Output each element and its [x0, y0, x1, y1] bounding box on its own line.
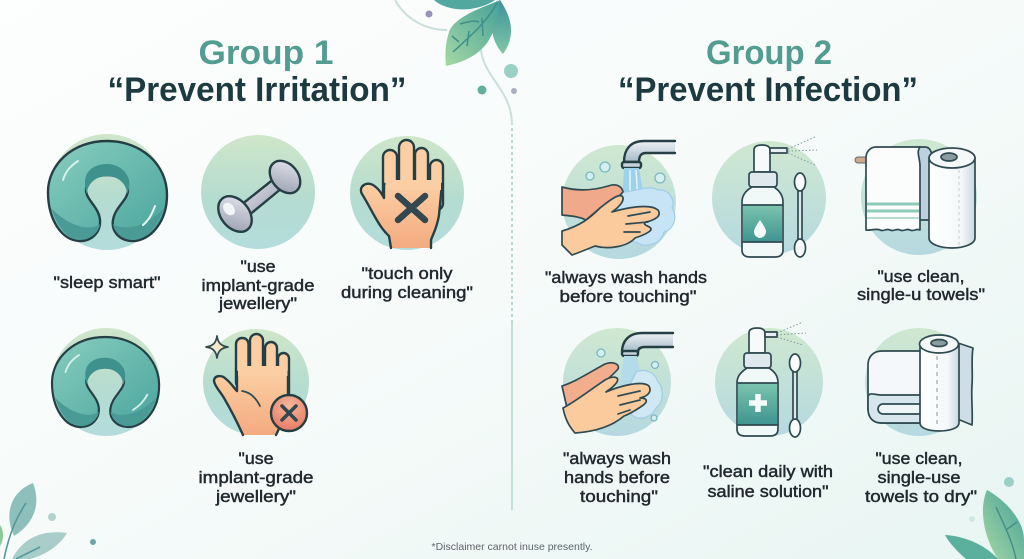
label: sleep smart: "sleep smart" [54, 273, 160, 292]
label: use clean, single-u towels: single-u towels" [857, 285, 985, 304]
label: use implant-grade jewellery (top): "use [240, 257, 276, 276]
label: clean daily with saline solution: saline solution" [708, 482, 828, 501]
icon: neck pillow 1 [48, 134, 167, 250]
icon: washing hands under tap 2 [562, 328, 673, 436]
label: use implant-grade jewellery (bottom): "use [238, 449, 274, 468]
label: clean daily with saline solution: "clean daily with [703, 462, 833, 481]
icon: neck pillow 2 [52, 328, 160, 436]
heading: group 1: “Prevent Irritation” [108, 71, 406, 109]
label: use implant-grade jewellery (top): jewellery" [218, 294, 297, 313]
centre divider [511, 128, 513, 510]
heading: group 1 [108, 34, 406, 109]
icon: towel and paper roll 1 [855, 139, 977, 255]
top botanical decoration [395, 0, 518, 125]
label: use clean, single-u towels [857, 267, 985, 304]
label: touch only during cleaning [341, 264, 473, 302]
icon: saline spray and swab 2 [715, 322, 823, 437]
heading: group 2: Group 2 [706, 34, 832, 72]
label: always wash hands before touching (top): before touching" [560, 287, 696, 306]
label: touch only during cleaning: "touch only [362, 264, 453, 283]
label: use clean, single-use towels to dry: "use clean, [876, 449, 962, 468]
label: clean daily with saline solution [703, 462, 833, 501]
label: use clean, single-u towels: "use clean, [878, 267, 964, 286]
label: use clean, single-use towels to dry [865, 449, 977, 506]
icon: washing hands under tap 1 [562, 141, 676, 259]
bottom-left botanical decoration [0, 483, 96, 559]
heading: group 2 [618, 34, 918, 109]
label: always wash hands before touching (bottom) [563, 449, 671, 506]
icon: hand with cross [350, 136, 464, 250]
label: use implant-grade jewellery (top) [202, 257, 314, 313]
label: use implant-grade jewellery (bottom) [198, 449, 314, 506]
label: use implant-grade jewellery (top): implant-grade [202, 276, 314, 295]
label: touch only during cleaning: during cleaning" [341, 283, 473, 302]
label: always wash hands before touching (bottom): "always wash [563, 449, 671, 468]
label: use clean, single-use towels to dry: towels to dry" [865, 487, 977, 506]
disclaimer: *Disclaimer carnot inuse presently. [432, 541, 592, 553]
label: always wash hands before touching (top) [545, 268, 707, 306]
bottom-right botanical decoration [945, 477, 1024, 559]
icon: raised hand with cross badge [203, 329, 309, 435]
icon: saline spray and swab 1 [712, 137, 826, 257]
label: use clean, single-use towels to dry: single-use [878, 468, 960, 487]
heading: group 1: Group 1 [198, 34, 334, 72]
label: always wash hands before touching (top): "always wash hands [545, 268, 707, 287]
label: use implant-grade jewellery (bottom): implant-grade [198, 468, 314, 487]
icon: implant-grade barbell [201, 135, 315, 249]
icon: folded towel and paper roll 2 [865, 328, 973, 436]
label: use implant-grade jewellery (bottom): jewellery" [215, 487, 296, 506]
label: always wash hands before touching (bottom): hands before [564, 468, 670, 487]
heading: group 2: “Prevent Infection” [618, 71, 918, 109]
label: always wash hands before touching (bottom): touching" [580, 487, 658, 506]
